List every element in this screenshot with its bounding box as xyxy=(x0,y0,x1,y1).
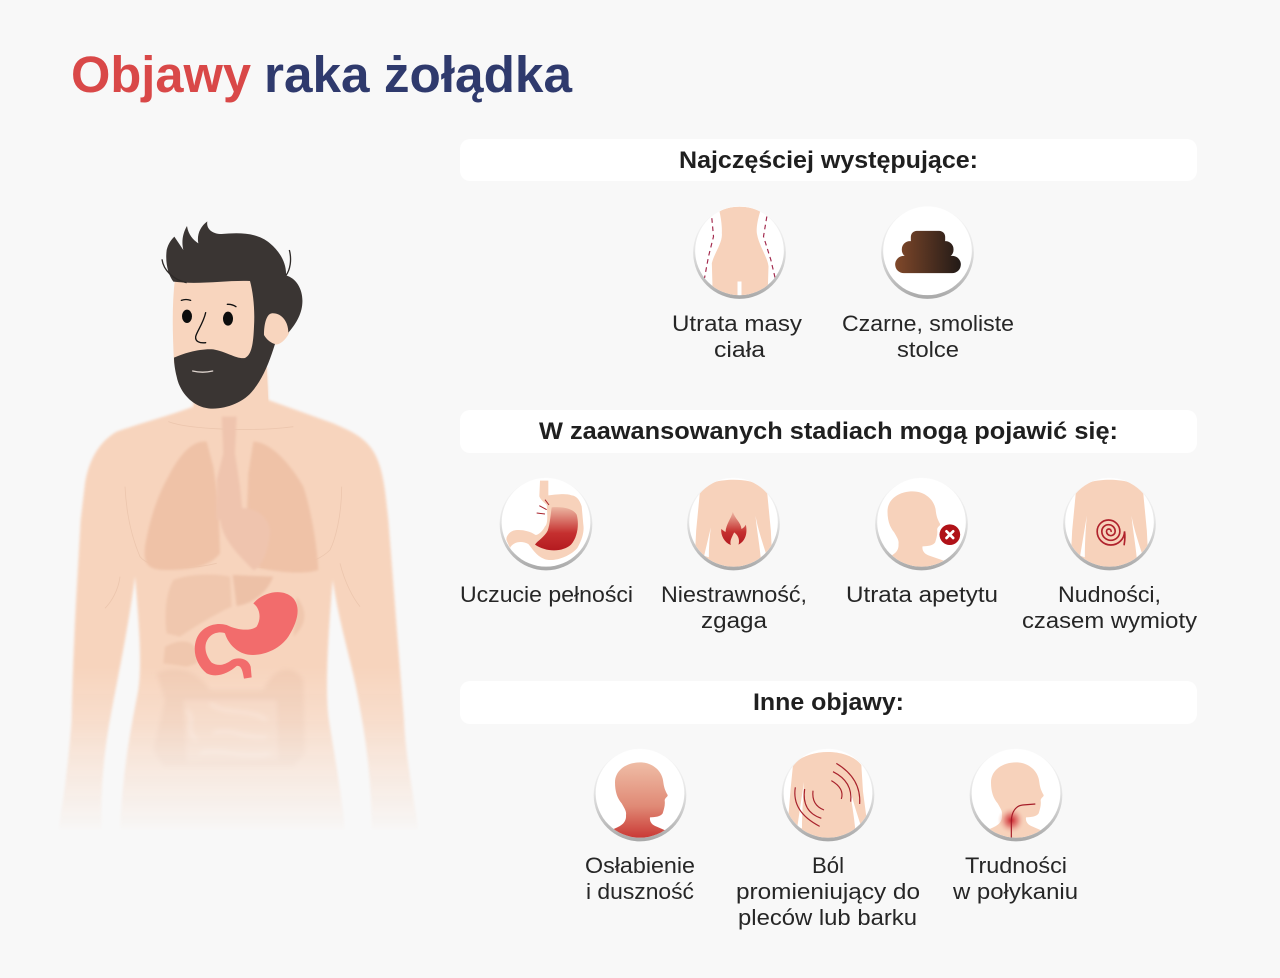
title: red part: Objawy xyxy=(71,46,252,103)
title xyxy=(71,46,573,103)
brows, nose xyxy=(181,299,236,343)
heading band xyxy=(460,139,1197,181)
hair and beard xyxy=(166,221,302,409)
label: Utrata masy xyxy=(672,311,802,336)
icon: fullness xyxy=(500,478,592,570)
icon: black stool xyxy=(881,206,974,299)
stray hairs xyxy=(162,250,291,283)
label: Osłabienie xyxy=(585,853,695,878)
trachea and heart xyxy=(217,416,258,570)
heading: Inne objawy: xyxy=(753,689,904,716)
label: promieniujący do xyxy=(736,879,920,904)
icon: weight loss xyxy=(693,206,786,299)
neck xyxy=(193,367,268,413)
label: Niestrawność, xyxy=(661,582,807,607)
icon: nausea xyxy=(1063,478,1156,571)
face xyxy=(173,278,257,363)
head xyxy=(162,221,302,413)
heading: Najczęściej występujące: xyxy=(679,147,978,174)
liver and upper organs xyxy=(163,574,304,667)
label: Trudności xyxy=(965,853,1067,878)
section 1 xyxy=(674,150,1013,357)
infographic xyxy=(63,55,1197,930)
body with organs xyxy=(58,367,418,830)
icon: heartburn xyxy=(687,478,780,571)
label: ciała xyxy=(714,337,766,362)
label: czasem wymioty xyxy=(1022,608,1197,633)
section 3 xyxy=(586,692,1076,930)
icon: weakness and breathlessness xyxy=(594,762,686,842)
eyes xyxy=(182,310,233,326)
label: Nudności, xyxy=(1058,582,1161,607)
label: Czarne, smoliste xyxy=(842,311,1014,336)
label: Uczucie pełności xyxy=(460,582,633,607)
ear xyxy=(260,312,289,345)
label: zgaga xyxy=(701,608,768,633)
icon: loss of appetite xyxy=(875,491,968,570)
label: stolce xyxy=(897,337,959,362)
section 2 xyxy=(460,410,1197,633)
title: navy part: raka żołądka xyxy=(264,46,573,103)
chest and arm lines xyxy=(105,422,360,608)
torso and arms xyxy=(58,367,418,830)
icon: difficulty swallowing xyxy=(970,762,1062,842)
illustration: man with stomach highlighted xyxy=(58,221,418,830)
heading: W zaawansowanych stadiach mogą pojawić się: xyxy=(539,418,1118,445)
heading band xyxy=(460,681,1197,724)
mouth xyxy=(193,371,213,372)
icon: radiating back pain xyxy=(782,749,874,842)
label: Ból xyxy=(812,853,844,878)
heading band xyxy=(460,410,1197,453)
label: Utrata apetytu xyxy=(846,582,998,607)
label: w połykaniu xyxy=(952,879,1078,904)
label: pleców lub barku xyxy=(738,905,917,930)
colon and intestines xyxy=(160,672,301,706)
stomach xyxy=(195,592,298,679)
label: i duszność xyxy=(586,879,694,904)
lungs xyxy=(145,442,318,573)
